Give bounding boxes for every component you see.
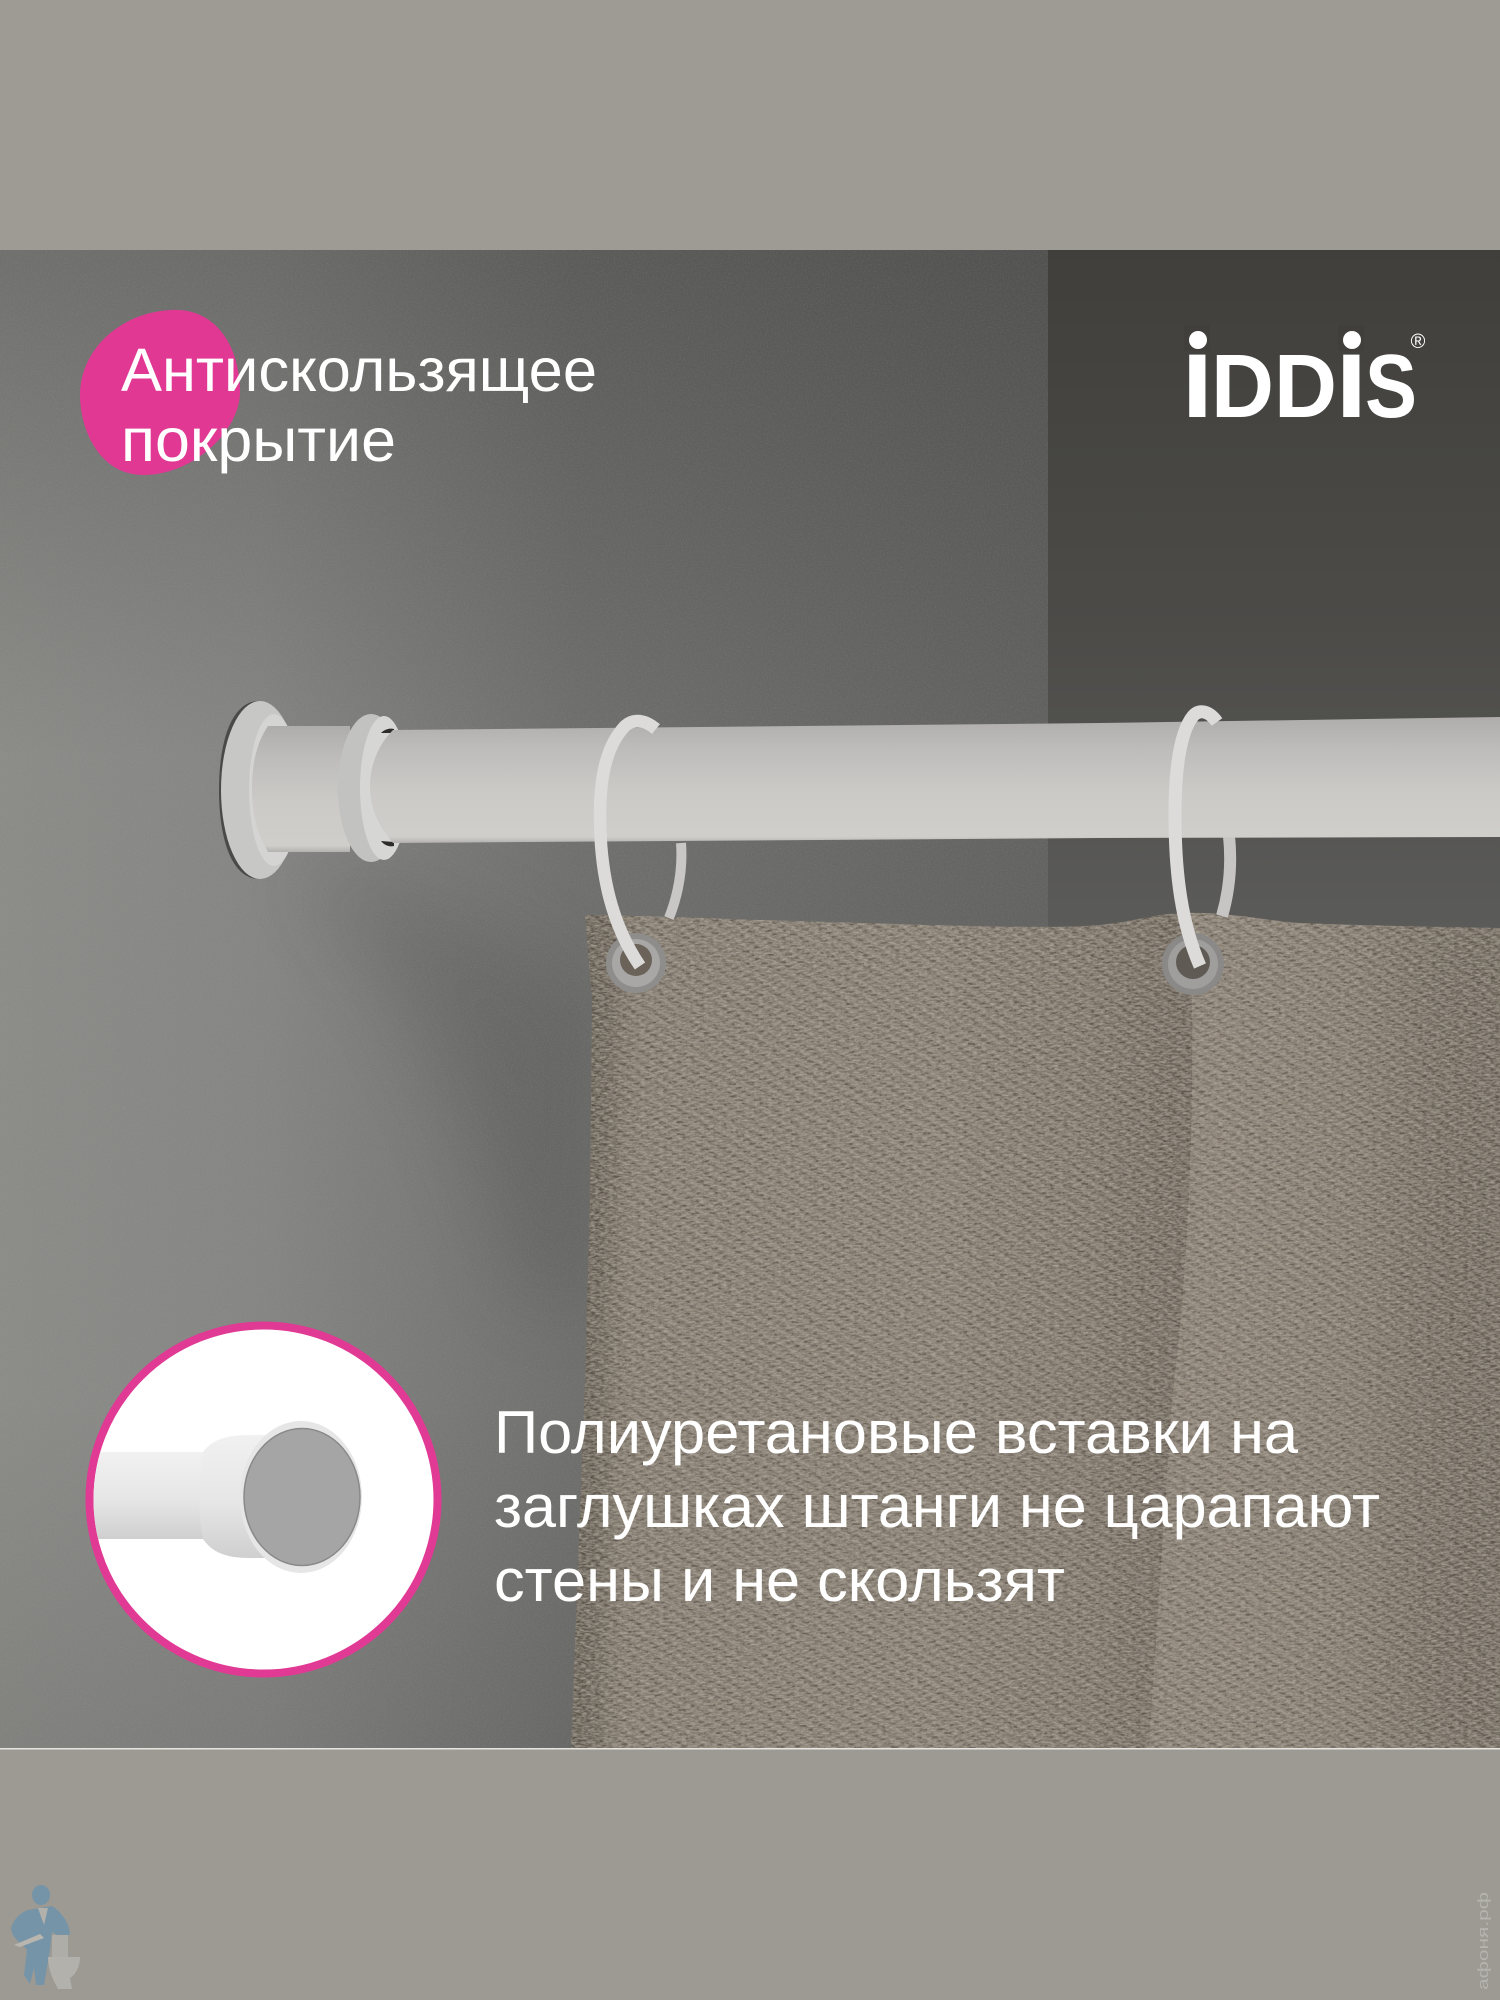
rod end collar (252, 726, 350, 852)
eyelet 2 (1162, 933, 1224, 995)
top grey band (0, 0, 1500, 250)
brand logo: IDDIS: D (1211, 337, 1274, 437)
eyelet 1 (606, 933, 666, 993)
heading: anti-slip coating: покрытие (121, 406, 396, 474)
bottom grey band (0, 1748, 1500, 2000)
pink blob accent (80, 310, 240, 475)
short rod (94, 1452, 203, 1539)
brand logo: IDDIS (1181, 311, 1426, 443)
watermark: site name: афоня.рф (1475, 1892, 1492, 1990)
rod end flange (219, 701, 288, 879)
left wall (0, 250, 1048, 1748)
back of curtain ring 2 (1222, 836, 1230, 916)
registered mark: ® (1411, 331, 1426, 353)
body text: polyurethane inserts: стены и не скользят (494, 1547, 1065, 1614)
watermark: plumber with toilet (11, 1885, 80, 1989)
front of curtain ring 2 (1175, 712, 1217, 966)
photo panel: shower rod and curtain (0, 250, 1500, 1760)
body text: polyurethane inserts: заглушках штанги не царапают (494, 1473, 1380, 1540)
front of curtain ring 1 (600, 721, 656, 966)
heading: anti-slip coating: Антискользящее (121, 336, 597, 404)
collar (203, 1435, 266, 1558)
body text: polyurethane inserts: Полиуретановые вставки на (494, 1399, 1299, 1466)
main rod (370, 717, 1500, 843)
thin white line above the bottom band (0, 1748, 1500, 1750)
polyurethane insert (244, 1428, 360, 1566)
brand logo: IDDIS: i (1335, 311, 1368, 443)
curtain (560, 900, 1500, 1760)
right wall (1048, 250, 1500, 940)
rod ring collar (338, 714, 400, 862)
cap rim (240, 1421, 362, 1573)
brand logo: IDDIS: S (1365, 337, 1417, 437)
back of curtain ring 1 (669, 843, 681, 918)
brand logo: IDDIS: i (1181, 311, 1214, 443)
inset detail: rod end cap (90, 1326, 438, 1674)
brand logo: IDDIS: D (1274, 337, 1337, 437)
